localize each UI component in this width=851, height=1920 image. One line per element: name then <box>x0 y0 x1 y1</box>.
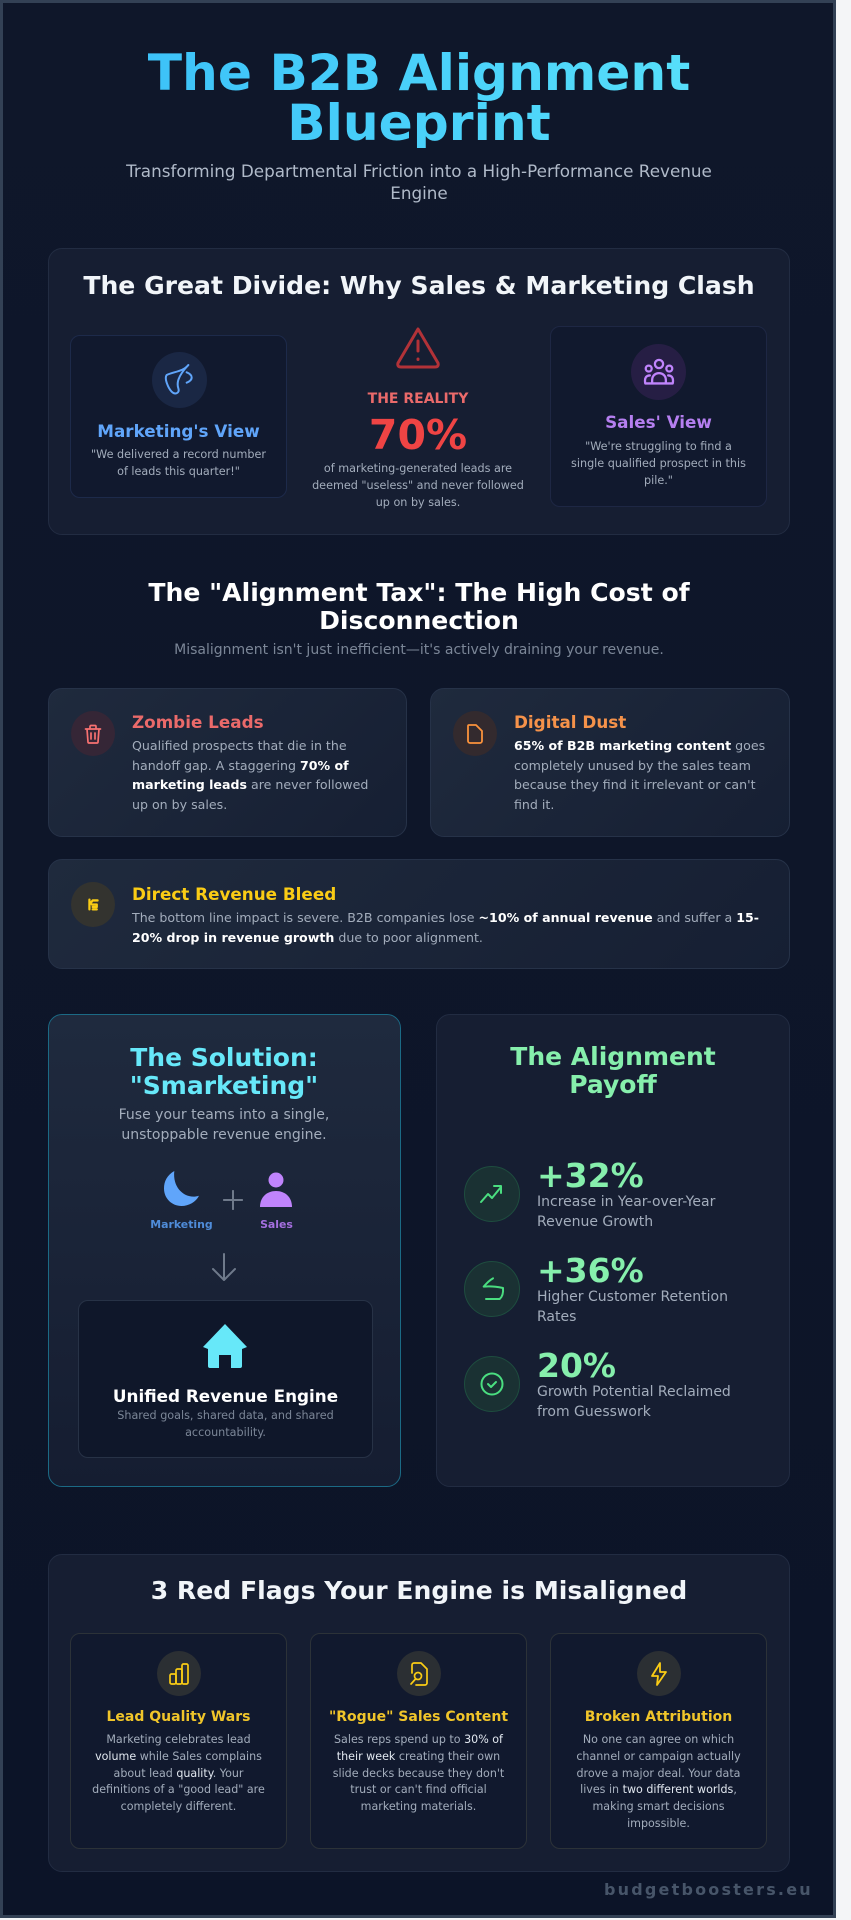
text: direct revenue bleed: 20% drop in revenue growth due to poor alignment. <box>132 930 483 945</box>
subtitle: alignment tax: Misalignment isn't just inefficient—it's actively draining your revenue. <box>174 642 664 658</box>
heading: alignment tax: Disconnection <box>319 606 519 635</box>
text: direct revenue bleed <box>132 910 759 945</box>
quote: sales: "We're struggling to find a <box>585 440 732 453</box>
icon: check circle <box>464 1356 520 1412</box>
text: zombie leads: Qualified prospects that die in the <box>132 738 347 753</box>
card: direct revenue bleed <box>48 859 790 969</box>
icon: revenue bleed <box>71 882 115 927</box>
quote: sales: pile." <box>644 474 673 487</box>
stat: 70%: 70% <box>369 411 467 459</box>
heading: the solution <box>130 1043 318 1100</box>
text: broken attribution: making smart decisions <box>592 1800 725 1813</box>
subtitle: Transforming Departmental Friction into a High-Performance Revenue <box>126 161 712 181</box>
text: the solution: unstoppable revenue engine. <box>121 1127 327 1143</box>
text: zombie leads <box>132 738 368 812</box>
subtitle: Engine <box>390 183 448 203</box>
text: rogue sales content: their week creating their own <box>337 1750 500 1763</box>
text: digital dust: completely unused by the sales team <box>514 758 751 773</box>
text: zombie leads: handoff gap. A staggering 70% of <box>132 758 349 773</box>
text: 20%: Growth Potential Reclaimed <box>537 1384 731 1400</box>
label: sales: Sales <box>260 1218 293 1231</box>
text: reality description: deemed "useless" and never followed <box>312 479 524 492</box>
text: +36%: Higher Customer Retention <box>537 1289 728 1305</box>
text: unified revenue engine <box>117 1409 334 1438</box>
text: reality description <box>312 462 524 509</box>
text: lead quality wars: completely different. <box>121 1800 236 1813</box>
icon: sales person <box>260 1172 292 1207</box>
icon: retention <box>464 1261 520 1317</box>
text: unified revenue engine: accountability. <box>185 1426 266 1438</box>
text: +32%: Increase in Year-over-Year <box>537 1194 715 1210</box>
heading: lead quality wars: Lead Quality Wars <box>106 1709 250 1725</box>
icon: plus <box>223 1190 243 1210</box>
text: digital dust: 65% of B2B marketing content goes <box>514 738 765 753</box>
heading: the solution: The Solution: <box>130 1043 318 1072</box>
text: broken attribution: No one can agree on which <box>583 1733 734 1746</box>
panel: the great divide <box>48 248 790 535</box>
heading: sales' view: Sales' View <box>605 412 712 432</box>
icon: lightning bolt <box>637 1651 681 1696</box>
text: +36% <box>537 1289 728 1325</box>
icon: trash <box>71 711 115 756</box>
value: +32%: +32% <box>537 1156 644 1195</box>
title: The B2B Alignment <box>148 43 690 102</box>
heading: rogue sales content: "Rogue" Sales Content <box>329 1709 508 1725</box>
icon: marketing moon <box>164 1171 199 1206</box>
heading: direct revenue bleed: Direct Revenue Bleed <box>132 884 336 904</box>
text: digital dust <box>514 738 765 812</box>
text: rogue sales content <box>333 1733 504 1813</box>
heading: alignment payoff: Payoff <box>569 1070 657 1099</box>
card: rogue sales content <box>310 1633 527 1849</box>
quote: sales: single qualified prospect in this <box>571 457 746 470</box>
text: broken attribution <box>576 1733 741 1830</box>
text: broken attribution: lives in two different worlds, <box>580 1783 737 1796</box>
text: +32%: Revenue Growth <box>537 1214 653 1230</box>
heading: alignment tax <box>148 578 690 635</box>
title: Blueprint <box>287 93 551 152</box>
panel: the alignment payoff <box>436 1014 790 1487</box>
text: 20%: from Guesswork <box>537 1404 651 1420</box>
text: digital dust: find it. <box>514 797 554 812</box>
stat: +32% <box>464 1156 716 1230</box>
icon: file search <box>397 1651 441 1696</box>
quote: marketing: "We delivered a record number <box>91 448 266 461</box>
card: sales' view <box>550 326 767 507</box>
card: marketing's view <box>70 335 287 498</box>
text: rogue sales content: marketing materials. <box>361 1800 476 1813</box>
text: zombie leads: up on by sales. <box>132 797 227 812</box>
quote: marketing: of leads this quarter!" <box>117 465 240 478</box>
heading: great divide: The Great Divide: Why Sales & Marketing Clash <box>83 271 755 300</box>
text: +32% <box>537 1194 716 1230</box>
icon: team <box>631 344 686 400</box>
value: +36%: +36% <box>537 1251 644 1290</box>
box: unified revenue engine <box>78 1300 373 1458</box>
title <box>48 48 790 148</box>
text: +36%: Rates <box>537 1309 576 1325</box>
label: the reality: THE REALITY <box>368 391 468 407</box>
icon: house <box>203 1324 247 1368</box>
text: 20% <box>537 1384 731 1420</box>
subtitle <box>126 161 712 203</box>
center: the reality stat <box>312 327 524 509</box>
text: the solution <box>119 1107 329 1143</box>
heading: broken attribution: Broken Attribution <box>585 1709 732 1725</box>
heading: the solution: "Smarketing" <box>130 1071 318 1100</box>
card: broken attribution <box>550 1633 767 1849</box>
heading: alignment tax: The "Alignment Tax": The High Cost of <box>148 578 690 607</box>
stat: 20% <box>464 1346 731 1420</box>
icon: megaphone <box>152 352 207 408</box>
text: rogue sales content: slide decks because they don't <box>333 1767 504 1780</box>
quote: sales <box>571 440 746 487</box>
card: lead quality wars <box>70 1633 287 1849</box>
heading: marketing's view: Marketing's View <box>97 421 260 441</box>
panel: red flags <box>48 1554 790 1872</box>
text: zombie leads: marketing leads are never followed <box>132 777 368 792</box>
text: broken attribution: impossible. <box>627 1817 690 1830</box>
heading: digital dust: Digital Dust <box>514 712 626 732</box>
text: lead quality wars: Marketing celebrates lead <box>106 1733 251 1746</box>
text: lead quality wars: about lead quality. Your <box>114 1767 243 1780</box>
text: rogue sales content: trust or can't find official <box>350 1783 487 1796</box>
icon: warning triangle <box>396 327 440 368</box>
text: direct revenue bleed: The bottom line impact is severe. B2B companies lose ~10% of annual revenue and suffer a 15- <box>132 910 759 925</box>
text: reality description: up on by sales. <box>376 496 460 509</box>
text: lead quality wars <box>92 1733 265 1813</box>
card: zombie leads <box>48 688 407 837</box>
icon: bar chart <box>157 1651 201 1696</box>
quote: marketing <box>91 448 266 478</box>
heading: zombie leads: Zombie Leads <box>132 712 264 732</box>
label: marketing: Marketing <box>150 1218 213 1231</box>
icon: document <box>453 711 497 756</box>
card: digital dust <box>430 688 790 837</box>
text: rogue sales content: Sales reps spend up to 30% of <box>334 1733 503 1746</box>
text: lead quality wars: volume while Sales complains <box>95 1750 262 1763</box>
icon: down arrow <box>212 1253 236 1281</box>
heading: unified revenue engine: Unified Revenue Engine <box>113 1386 338 1406</box>
text: unified revenue engine: Shared goals, shared data, and shared <box>117 1409 334 1422</box>
text: broken attribution: channel or campaign actually <box>576 1750 741 1763</box>
text: broken attribution: drove a major deal. Your data <box>577 1767 740 1780</box>
text: the solution: Fuse your teams into a single, <box>119 1107 329 1123</box>
text: reality description: of marketing-generated leads are <box>324 462 512 475</box>
watermark: budgetboosters.eu <box>604 1880 813 1899</box>
text: lead quality wars: definitions of a "good lead" are <box>92 1783 265 1796</box>
heading: alignment payoff <box>510 1042 716 1099</box>
heading: alignment payoff: The Alignment <box>510 1042 716 1071</box>
value: 20%: 20% <box>537 1346 616 1385</box>
stat: +36% <box>464 1251 728 1325</box>
text: digital dust: because they find it irrelevant or can't <box>514 777 756 792</box>
panel: the solution <box>48 1014 401 1487</box>
heading: red flags: 3 Red Flags Your Engine is Misaligned <box>151 1576 687 1605</box>
icon: trending up <box>464 1166 520 1222</box>
